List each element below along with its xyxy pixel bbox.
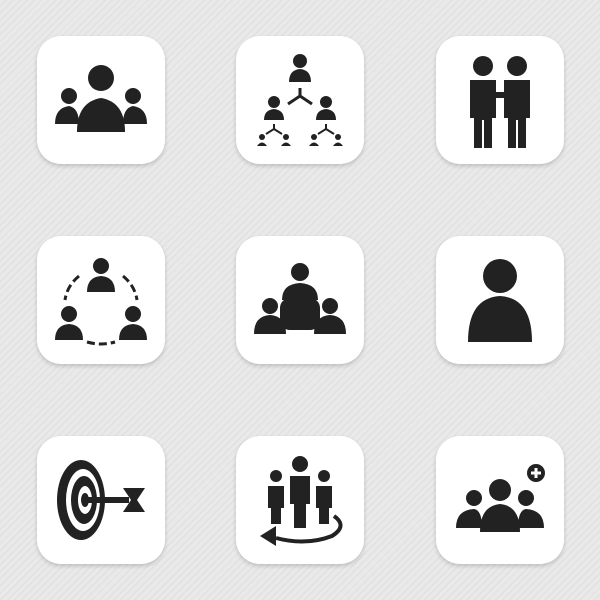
icon: add group (456, 464, 545, 532)
icon: team group (55, 65, 147, 132)
icon: partners (470, 56, 530, 148)
tile: partners (436, 36, 564, 164)
icon: team rotation (260, 456, 341, 546)
tile: meeting (236, 236, 364, 364)
tile: single user (436, 236, 564, 364)
icon: target (57, 460, 145, 540)
icon: meeting (254, 263, 346, 334)
tile: target (37, 436, 165, 564)
tile: team rotation (236, 436, 364, 564)
tile: cycle team (37, 236, 165, 364)
tile: hierarchy (236, 36, 364, 164)
icon: hierarchy (257, 54, 343, 146)
tile: add group (436, 436, 564, 564)
icon: user (468, 259, 532, 342)
icon: cycle team (55, 258, 147, 344)
tile: team group (37, 36, 165, 164)
